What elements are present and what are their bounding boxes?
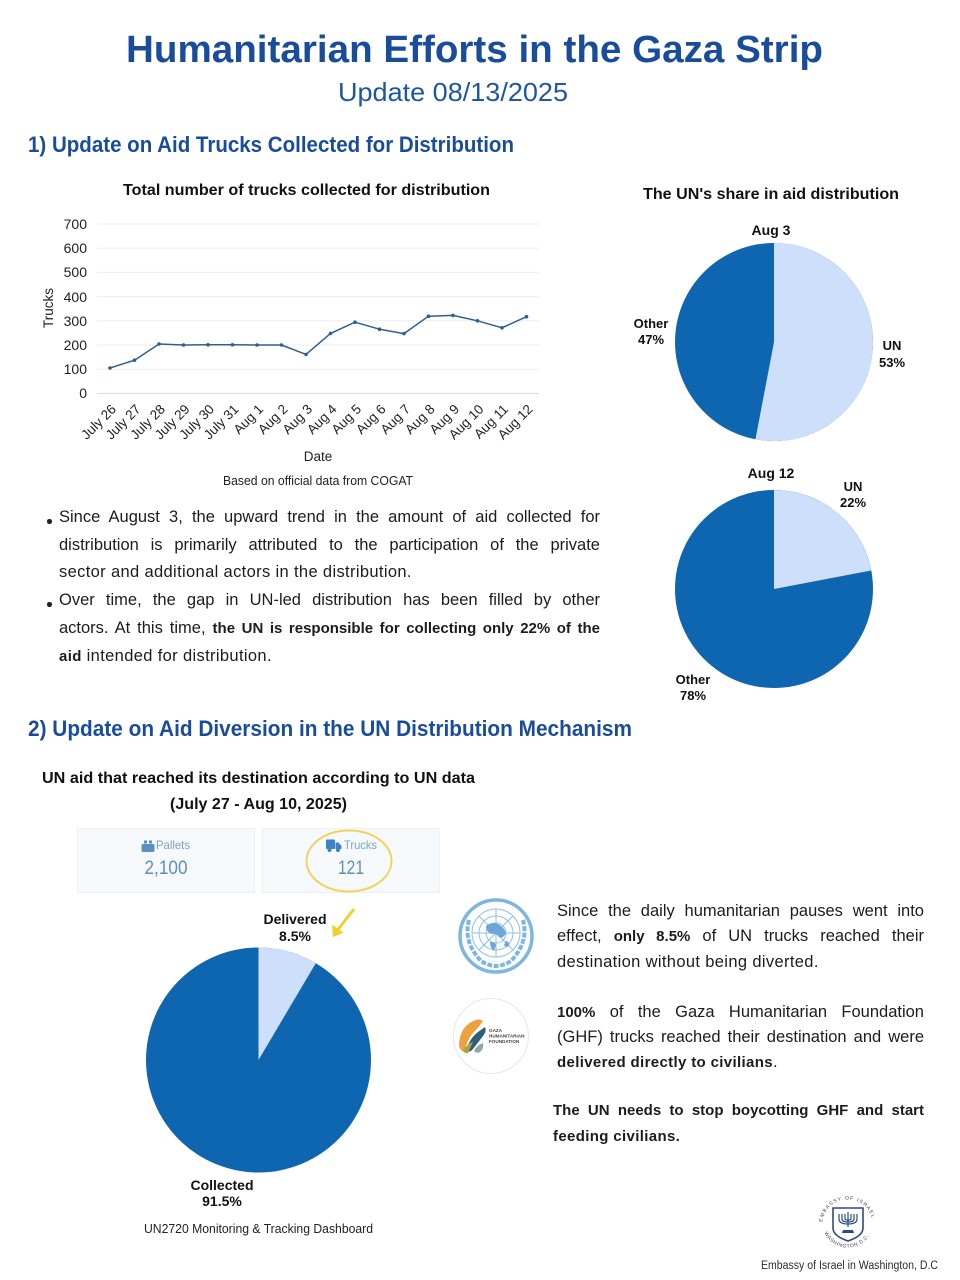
- line chart: total trucks collected: Aug 9: [427, 402, 462, 437]
- text: UN trucks diverted: Since the daily humanitarian pauses went into: [557, 902, 924, 920]
- pie chart: Aug 3: 53%: [879, 355, 905, 370]
- bullet text: section 1 findings: actors. At this time, the UN is responsible for collecting only 22% of the: [59, 619, 600, 637]
- pie chart: Aug 3: 47%: [638, 332, 664, 347]
- icon: embassy seal: EMBASSY OF ISRAEL: [818, 1196, 875, 1222]
- heading: UN share pies: The UN's share in aid distribution: [643, 186, 899, 203]
- title: Update 08/13/2025: [338, 77, 568, 107]
- bullet text: section 1 findings: sector and additional actors in the distribution.: [59, 563, 412, 581]
- line chart: total trucks collected: Aug 3: [280, 402, 315, 437]
- bullet text: section 1 findings: distribution is primarily attributed to the participation of the private: [59, 536, 600, 554]
- line chart: total trucks collected: Aug 7: [378, 402, 413, 437]
- pie chart: delivered vs collected: Collected: [190, 1177, 254, 1193]
- line chart: total trucks collected: July 30: [176, 402, 217, 442]
- line chart: total trucks collected: 300: [64, 313, 87, 329]
- card: pallets: 2,100: [144, 858, 188, 879]
- line chart: total trucks collected: Aug 2: [255, 402, 291, 437]
- line chart: total trucks collected: Aug 1: [231, 402, 266, 437]
- pie chart: Aug 12: 22%: [840, 495, 866, 510]
- heading: UN aid reached destination: (July 27 - Aug 10, 2025): [170, 796, 347, 813]
- line chart: total trucks collected: 400: [64, 289, 87, 305]
- icon: embassy seal: WASHINGTON D.C.: [824, 1231, 869, 1248]
- footer: embassy name: Embassy of Israel in Washington, D.C: [761, 1260, 938, 1272]
- icon: GHF logo: GAZA: [489, 1028, 503, 1033]
- pie chart: Aug 3: Other: [634, 316, 668, 331]
- heading: UN aid reached destination: UN aid that reached its destination according to UN data: [42, 770, 475, 787]
- line chart: total trucks collected: Aug 12: [495, 402, 536, 442]
- pie chart: Aug 12: Other: [676, 672, 710, 687]
- pie chart: Aug 3: UN: [883, 338, 901, 353]
- title: Humanitarian Efforts in the Gaza Strip: [126, 29, 823, 71]
- arrow: yellow pointer to delivered: [333, 909, 354, 936]
- pie chart: Aug 3: Aug 3: [752, 222, 791, 238]
- line chart: total trucks collected: 100: [64, 361, 87, 377]
- pie chart: Aug 12: [675, 465, 873, 703]
- text: GHF trucks delivered: 100% of the Gaza Humanitarian Foundation: [557, 1003, 924, 1021]
- line chart: total trucks collected: Aug 11: [471, 402, 511, 442]
- line chart: total trucks collected: Based on official data from COGAT: [223, 474, 413, 488]
- line chart: total trucks collected: Aug 6: [353, 402, 389, 437]
- title: [126, 29, 823, 107]
- line chart: total trucks collected: July 29: [152, 402, 193, 442]
- card: trucks: 121: [338, 858, 364, 879]
- card: pallets: Pallets: [156, 838, 190, 852]
- heading: section 2: 2) Update on Aid Diversion in the UN Distribution Mechanism: [28, 716, 632, 741]
- text: GHF trucks delivered: delivered directly to civilians.: [557, 1053, 778, 1071]
- icon: truck: [326, 840, 342, 852]
- pie chart: Aug 12: UN: [844, 479, 862, 494]
- pie chart: delivered vs collected: 8.5%: [279, 928, 312, 944]
- line chart: total trucks collected: July 28: [127, 402, 168, 442]
- line chart: total trucks collected: Date: [304, 449, 332, 464]
- text: GHF trucks delivered: [557, 1003, 924, 1071]
- bullet text: section 1 findings: [47, 508, 600, 665]
- text: GHF trucks delivered: (GHF) trucks reached their destination and were: [557, 1028, 924, 1046]
- pie chart: Aug 12: 78%: [680, 688, 706, 703]
- line chart: total trucks collected: Aug 10: [446, 402, 487, 442]
- line chart: total trucks collected: 500: [64, 264, 87, 280]
- heading: UN aid reached destination: [42, 770, 475, 813]
- line chart: total trucks collected: Aug 4: [304, 401, 340, 437]
- text: call to action: [553, 1102, 924, 1145]
- line chart: total trucks collected: 700: [64, 216, 87, 232]
- pie chart: delivered vs collected: 91.5%: [202, 1193, 242, 1209]
- text: call to action: The UN needs to stop boycotting GHF and start: [553, 1102, 924, 1119]
- icon: pallets box: [142, 840, 154, 852]
- card: pallets: [78, 828, 254, 892]
- icon: GHF logo: HUMANITARIAN: [489, 1034, 525, 1038]
- line chart: total trucks collected: Aug 5: [329, 402, 364, 437]
- pie chart: Aug 12: Aug 12: [748, 465, 795, 481]
- source note: UN2720 Monitoring & Tracking Dashboard: [144, 1222, 373, 1236]
- line chart: total trucks collected: 600: [64, 240, 87, 256]
- chart title: Total number of trucks collected for distribution: [123, 182, 490, 199]
- line chart: total trucks collected: July 27: [103, 402, 144, 442]
- icon: GHF logo: FOUNDATION: [489, 1039, 520, 1044]
- text: UN trucks diverted: effect, only 8.5% of UN trucks reached their: [557, 927, 924, 945]
- pie chart: delivered vs collected: Delivered: [263, 911, 327, 927]
- card: trucks: Trucks: [344, 838, 377, 852]
- line chart: total trucks collected: 0: [79, 385, 87, 401]
- bullet text: section 1 findings: Since August 3, the upward trend in the amount of aid collected for: [59, 508, 600, 526]
- icon: embassy seal: [818, 1196, 875, 1248]
- line chart: total trucks collected: Trucks: [41, 288, 56, 328]
- bullet text: section 1 findings: aid intended for distribution.: [59, 647, 272, 665]
- line chart: total trucks collected: Aug 8: [402, 402, 438, 437]
- card: trucks: [262, 828, 440, 892]
- icon: GHF logo: [454, 998, 528, 1074]
- bullet text: section 1 findings: Over time, the gap in UN-led distribution has been filled by other: [59, 591, 600, 609]
- heading: section 1: 1) Update on Aid Trucks Collected for Distribution: [28, 132, 514, 157]
- line chart: total trucks collected: July 31: [201, 402, 242, 442]
- line chart: total trucks collected: 200: [64, 337, 87, 353]
- line chart: total trucks collected: July 26: [78, 402, 119, 442]
- icon: UN emblem: [460, 900, 532, 972]
- line chart: total trucks collected: [41, 182, 539, 488]
- text: UN trucks diverted: destination without being diverted.: [557, 953, 819, 971]
- text: UN trucks diverted: [557, 902, 924, 971]
- text: call to action: feeding civilians.: [553, 1128, 680, 1145]
- highlight ellipse: [306, 830, 392, 892]
- pie chart: Aug 3: [634, 222, 905, 441]
- pie chart: delivered vs collected: [146, 911, 371, 1209]
